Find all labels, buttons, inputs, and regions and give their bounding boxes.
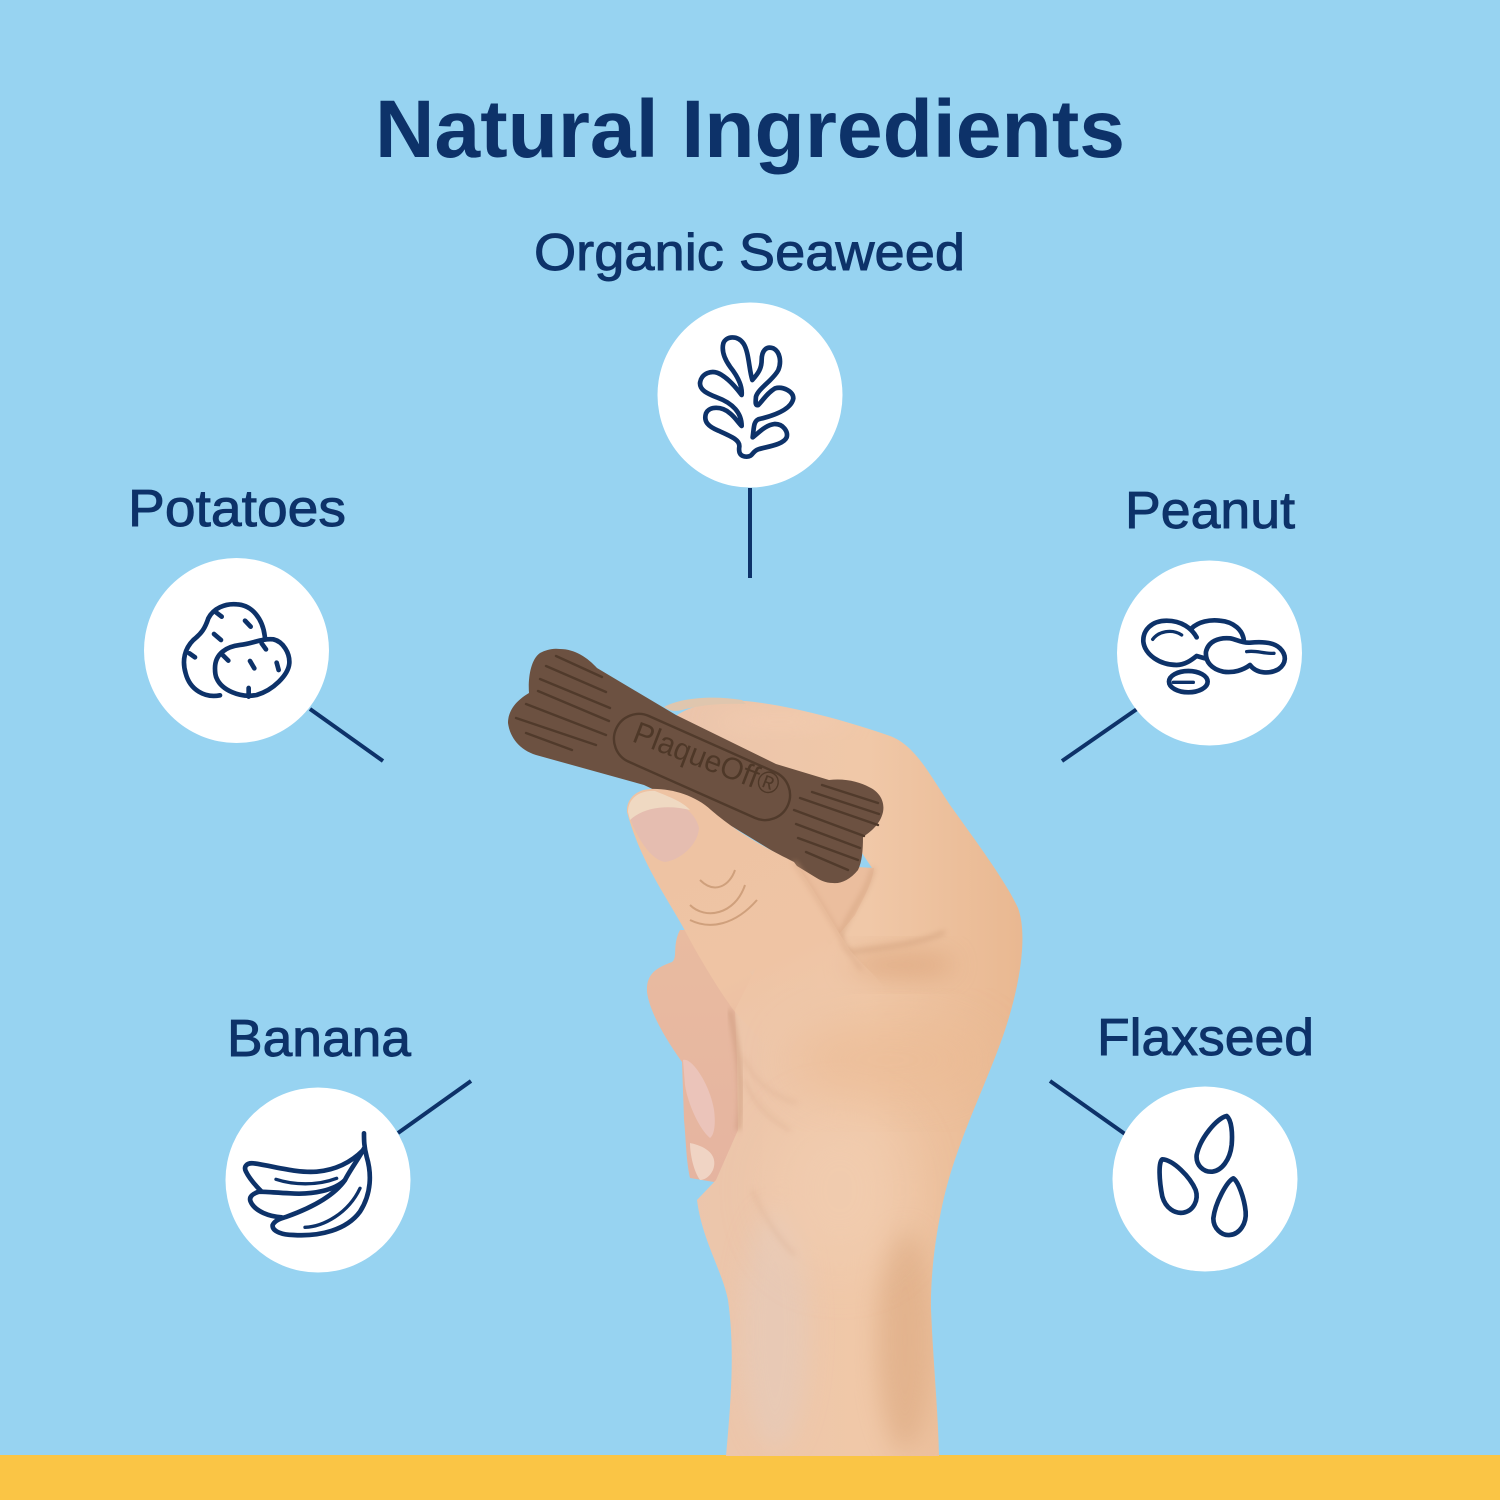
icon: peanut [1143,620,1285,692]
label: organic seaweed: Organic Seaweed [534,224,965,282]
connector: peanut [1062,709,1137,761]
ingredient: organic seaweed [534,224,965,488]
nail: lower fingers [683,1060,715,1138]
connector: potatoes [310,709,383,761]
middle finger behind chew [758,861,874,945]
brand text: PlaqueOff® [628,715,785,803]
ingredient: peanut [1117,482,1302,746]
brand pill [606,706,798,828]
palm, index finger and wrist [676,701,1022,1456]
ingredient: banana [226,1010,411,1272]
ingredient: flaxseed [1097,1009,1314,1272]
label: peanut: Peanut [1125,482,1296,540]
label: flaxseed: Flaxseed [1097,1009,1314,1067]
finger crease shadow [840,868,945,952]
icon: seaweed [700,337,793,457]
ingredient: potatoes [128,480,346,743]
icon: flaxseed [1160,1116,1246,1235]
thumb edge crease [794,862,862,970]
hand holding dental chew [508,649,1022,1456]
dental chew [508,649,883,883]
nail: index finger [664,698,746,711]
thumb knuckle creases [690,870,757,925]
skin shading [710,712,990,1450]
label: banana: Banana [227,1010,411,1068]
connector: flaxseed [1050,1081,1125,1134]
circle: potatoes [144,558,329,743]
circle: banana [226,1088,410,1272]
left finger edge shadow [730,1010,740,1130]
title: Natural Ingredients [375,84,1125,175]
connector: banana [398,1081,471,1133]
chew grooves [516,656,879,870]
thumb nail [628,791,699,862]
circle: seaweed [658,302,842,488]
lower fingers [647,930,770,1182]
circle: flaxseed [1112,1086,1298,1272]
palm creases [743,1057,797,1255]
label: potatoes: Potatoes [128,480,346,538]
icon: potatoes [184,604,289,697]
thumb [627,789,887,1050]
circle: peanut [1117,560,1302,746]
connector: seaweed [748,488,752,578]
bottom yellow band [0,1455,1500,1500]
icon: banana [245,1133,370,1235]
